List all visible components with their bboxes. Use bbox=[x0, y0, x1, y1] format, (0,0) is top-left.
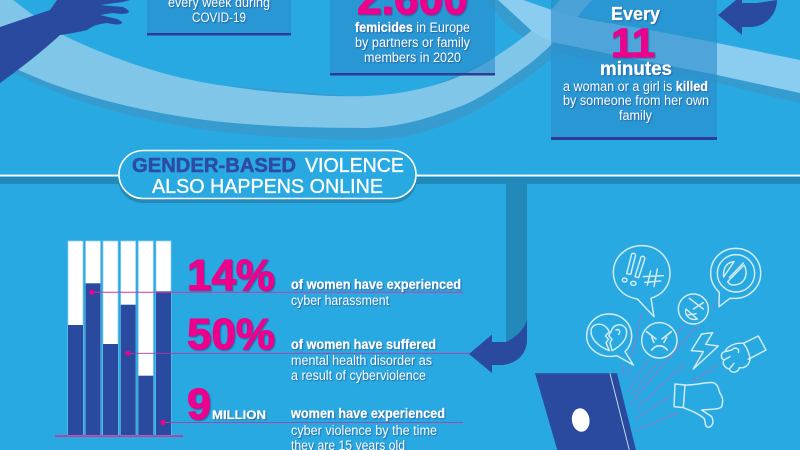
ribbon: awareness ribbon arcs bbox=[0, 0, 800, 140]
stat: 9 million: MILLION bbox=[212, 408, 266, 422]
panel: femicides statistic bbox=[330, 0, 495, 76]
heading pill: gender-based violence also happens online: GENDER-BASED bbox=[132, 155, 296, 177]
icon: angry face bbox=[642, 323, 677, 358]
text: 15 years old: women have experienced bbox=[290, 406, 445, 421]
panel: weekly statistic bbox=[147, 0, 291, 36]
leader line: 9 million bbox=[160, 420, 463, 425]
text: killed description bbox=[563, 79, 709, 123]
text: every week during COVID-19: COVID-19 bbox=[192, 10, 246, 25]
heading pill: gender-based violence also happens online: VIOLENCE bbox=[305, 155, 404, 177]
leader line: 14% bbox=[89, 290, 463, 295]
text: mental health: a result of cyberviolence bbox=[291, 368, 426, 383]
text: killed description: family bbox=[619, 108, 652, 123]
stat: 9 million: 9 bbox=[187, 380, 211, 429]
text: femicides description: femicides in Europe bbox=[355, 20, 470, 35]
arrow: top right curved arrow bbox=[718, 0, 777, 35]
text: every week during COVID-19 bbox=[168, 0, 270, 25]
text: femicides description: by partners or family bbox=[355, 35, 470, 50]
rays from laptop bbox=[622, 302, 717, 430]
text: cyber harassment bbox=[291, 277, 461, 308]
stat: 9 million bbox=[187, 380, 266, 429]
stat: 50%: 50% bbox=[187, 310, 275, 359]
text: mental health bbox=[291, 337, 436, 383]
text: cyber harassment: of women have experienced bbox=[291, 277, 461, 292]
icon: laptop bbox=[535, 373, 636, 450]
icon: lightning bolt bbox=[691, 333, 718, 369]
text: minutes: minutes bbox=[600, 59, 672, 80]
text: cyber harassment: cyber harassment bbox=[291, 293, 389, 308]
arrow: curved arrow pointing to statistics bbox=[469, 320, 527, 373]
text: mental health: mental health disorder as bbox=[291, 353, 432, 368]
text: killed description: by someone from her own bbox=[563, 93, 709, 108]
dark band behind heading bbox=[0, 175, 800, 344]
text: 15 years old bbox=[290, 406, 445, 450]
icon: reaching hand bbox=[0, 0, 130, 83]
text: Every: Every bbox=[611, 4, 660, 24]
text: femicides description: members in 2020 bbox=[364, 50, 461, 65]
text: killed description: a woman or a girl is killed bbox=[563, 79, 708, 94]
leader line: 50% bbox=[125, 351, 470, 356]
stat: 14%: 14% bbox=[187, 251, 275, 300]
icon: prohibited speech bubble bbox=[711, 248, 761, 307]
number: 11: 11 bbox=[611, 20, 655, 66]
icon: swearing speech bubble bbox=[613, 246, 670, 317]
bar chart: six stacked bars bbox=[55, 241, 183, 437]
text: mental health: of women have suffered bbox=[291, 337, 436, 352]
icon: broken heart bubble bbox=[587, 314, 633, 365]
icon: mocking face bbox=[678, 294, 708, 324]
heading pill: gender-based violence also happens online bbox=[118, 150, 417, 203]
icon: thumbs down bbox=[674, 383, 723, 427]
heading pill: gender-based violence also happens online: ALSO HAPPENS ONLINE bbox=[152, 176, 383, 198]
text: femicides description bbox=[355, 20, 470, 65]
icons: online abuse symbols bbox=[587, 246, 766, 430]
text: 15 years old: cyber violence by the time bbox=[291, 423, 437, 438]
panel: every 11 minutes statistic bbox=[551, 0, 717, 140]
icon: fist bbox=[721, 336, 766, 372]
